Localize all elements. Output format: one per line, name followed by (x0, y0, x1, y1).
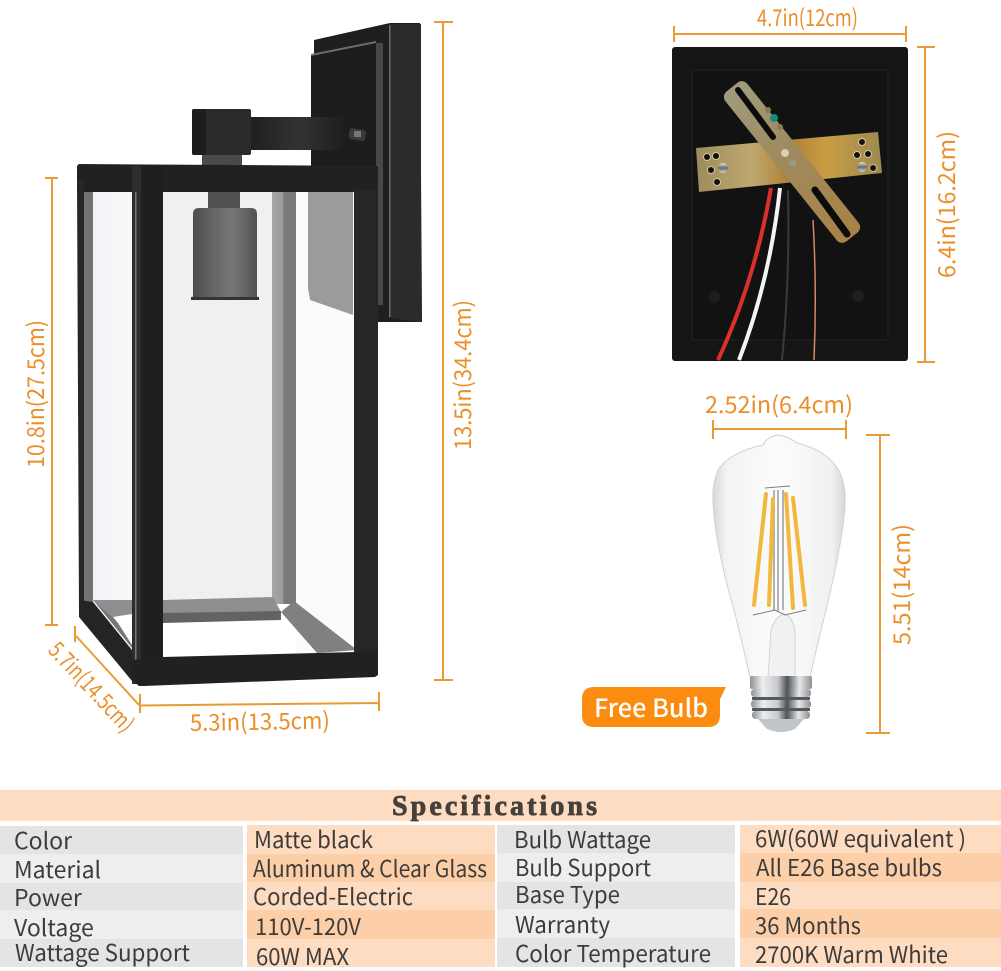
column 1: labels: Color (14, 822, 72, 856)
dimension: lantern height: 10.8in(27.5cm) (17, 320, 51, 468)
front frame (77, 164, 378, 686)
table header: Specifications (392, 791, 597, 822)
dimension: bulb width (705, 386, 853, 439)
column 4: values: E26 (755, 878, 791, 912)
column 2: values: Matte black (254, 821, 373, 855)
crossbar (721, 78, 863, 246)
wires (718, 188, 815, 360)
column 4: values (740, 820, 1001, 970)
column 2: values (247, 821, 495, 971)
column 1: labels (0, 822, 243, 968)
stem (768, 490, 795, 677)
mounting arm (192, 109, 367, 165)
column 4: values: 6W(60W equivalent ) (755, 820, 966, 854)
specifications table (0, 790, 1001, 971)
column 3: labels: Warranty (515, 906, 610, 940)
column 1: labels: Voltage (14, 909, 94, 943)
column 1: labels: Wattage Support (15, 934, 190, 968)
dimension: backplate height (917, 47, 962, 362)
dimension: bulb width: 2.52in(6.4cm) (705, 386, 853, 420)
column 4: values: 2700K Warm White (755, 936, 948, 970)
dimension: overall height (434, 22, 478, 680)
lantern illustration (77, 23, 422, 686)
column 3: labels: Bulb Support (515, 849, 651, 883)
dimension: bulb height (866, 435, 917, 733)
column 3: labels: Color Temperature (515, 935, 711, 969)
free bulb badge: Free Bulb (594, 689, 708, 725)
column 2: values: 110V-120V (255, 908, 362, 942)
dimension: lantern width (140, 692, 379, 738)
lamp socket (191, 192, 259, 300)
dimension: bulb height: 5.51(14cm) (883, 524, 917, 645)
dimension: lantern depth: 5.7in(14.5cm) (42, 633, 144, 738)
filaments (754, 494, 805, 608)
dimension: overall height: 13.5in(34.4cm) (444, 300, 478, 450)
mounting strap (696, 132, 882, 192)
glass panes (93, 190, 356, 655)
dimension: lantern width: 5.3in(13.5cm) (190, 702, 330, 738)
column 3: labels (497, 821, 735, 969)
wall backplate (311, 23, 422, 322)
column 4: values: 36 Months (755, 907, 861, 941)
column 2: values: Corded-Electric (253, 878, 413, 912)
column 2: values: Aluminum & Clear Glass (253, 850, 487, 884)
dimension: lantern depth (42, 626, 144, 738)
column 3: labels: Bulb Wattage (514, 821, 651, 855)
backplate photo (672, 47, 908, 361)
dimension: backplate height: 6.4in(16.2cm) (928, 131, 962, 278)
dimension: lantern height (17, 178, 58, 625)
column 3: labels: Base Type (515, 876, 620, 910)
dimension: backplate width (674, 0, 906, 42)
table header (0, 790, 1001, 822)
back frame (93, 192, 357, 653)
column 2: values: 60W MAX (256, 938, 349, 971)
bulb glass (713, 435, 845, 677)
dimension: backplate width: 4.7in(12cm) (757, 0, 858, 33)
column 1: labels: Power (14, 879, 82, 913)
LED bulb (713, 435, 845, 732)
column 1: labels: Material (14, 851, 101, 885)
column 4: values: All E26 Base bulbs (756, 849, 942, 883)
screw base (750, 676, 812, 732)
reflected backplate panel (308, 192, 353, 315)
